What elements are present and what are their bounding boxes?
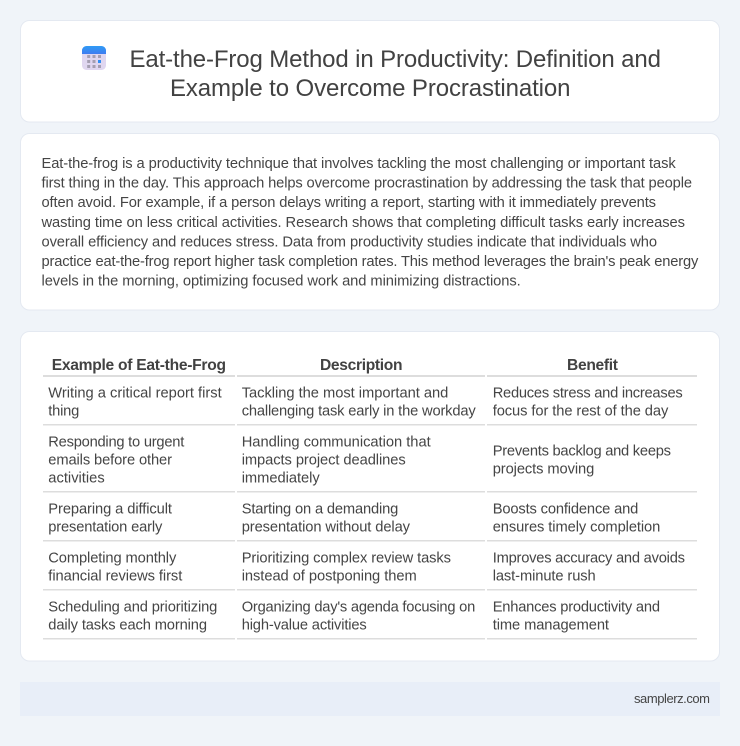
footer bar — [20, 682, 720, 716]
text block: definition: practice eat-the-frog report higher task completion rates. This method leverages the brain's peak energy — [42, 254, 699, 270]
table row 4: last-minute rush — [493, 568, 596, 584]
table row 3: Boosts confidence and — [493, 501, 638, 517]
panel: examples table — [20, 332, 720, 661]
table row 5: Enhances productivity and — [493, 600, 660, 616]
text block: definition: levels in the morning, optimizing focused work and minimizing distractions. — [42, 274, 521, 290]
table row 3: Preparing a difficult — [48, 501, 172, 517]
text block: definition — [40, 156, 699, 290]
footer bar: samplerz.com — [634, 691, 710, 706]
table row 1: Reduces stress and increases — [493, 386, 683, 402]
table row 5: Organizing day's agenda focusing on — [242, 600, 475, 616]
table row 2 — [43, 435, 697, 492]
text block: definition: Eat-the-frog is a productivity technique that involves tackling the most challenging or important task — [42, 156, 676, 172]
table row 2: activities — [48, 471, 105, 487]
table row 5: high-value activities — [242, 618, 367, 634]
table row 3: Starting on a demanding — [242, 501, 398, 517]
table row 1: thing — [48, 404, 79, 420]
icon: calendar — [82, 46, 106, 70]
table row 1: Writing a critical report first — [48, 386, 222, 402]
text block: definition: wasting time on less critical activities. Research shows that completing difficult tasks early increases — [40, 215, 685, 231]
panel: definition paragraph — [20, 134, 720, 310]
table row 4: instead of postponing them — [242, 568, 417, 584]
table row 5: daily tasks each morning — [48, 618, 207, 634]
table row 3: ensures timely completion — [493, 519, 660, 535]
table row 1 — [43, 386, 697, 426]
table row 5: time management — [493, 618, 609, 634]
table row 4: financial reviews first — [48, 568, 182, 584]
text block: definition: overall efficiency and reduces stress. Data from productivity studies indicate that individuals who — [42, 234, 657, 250]
table header: Description — [320, 357, 402, 374]
title: Example to Overcome Procrastination — [170, 75, 570, 102]
table row 2: projects moving — [493, 462, 594, 478]
table row 3: presentation early — [48, 519, 163, 535]
text block: definition: often avoid. For example, if a person delays writing a report, starting with it immediately prevents — [42, 195, 656, 211]
table row 1: focus for the rest of the day — [493, 404, 669, 420]
table row 4: Completing monthly — [48, 550, 177, 566]
table row 2: impacts project deadlines — [242, 453, 406, 469]
table row 3 — [43, 501, 697, 542]
table row 4 — [43, 550, 697, 590]
table row 2: immediately — [242, 471, 320, 487]
table row 5 — [43, 600, 697, 640]
text block: definition: first thing in the day. This approach helps overcome procrastination by addressing the task that people — [42, 176, 692, 192]
table row 5: Scheduling and prioritizing — [48, 600, 217, 616]
table row 1: Tackling the most important and — [242, 386, 448, 402]
table row 1: challenging task early in the workday — [242, 404, 476, 420]
table header: Example of Eat-the-Frog — [52, 357, 226, 374]
table row 4: Improves accuracy and avoids — [493, 550, 685, 566]
table row 4: Prioritizing complex review tasks — [242, 550, 451, 566]
table header: Benefit — [567, 357, 618, 374]
table row 3: presentation without delay — [242, 519, 411, 535]
table row 2: Handling communication that — [242, 435, 431, 451]
panel: title header — [20, 20, 720, 122]
table row 2: Prevents backlog and keeps — [493, 444, 671, 460]
title — [130, 46, 661, 102]
table row 2: Responding to urgent — [48, 435, 184, 451]
table header — [43, 357, 697, 377]
table row 2: emails before other — [48, 453, 172, 469]
title: Eat-the-Frog Method in Productivity: Definition and — [130, 46, 661, 73]
